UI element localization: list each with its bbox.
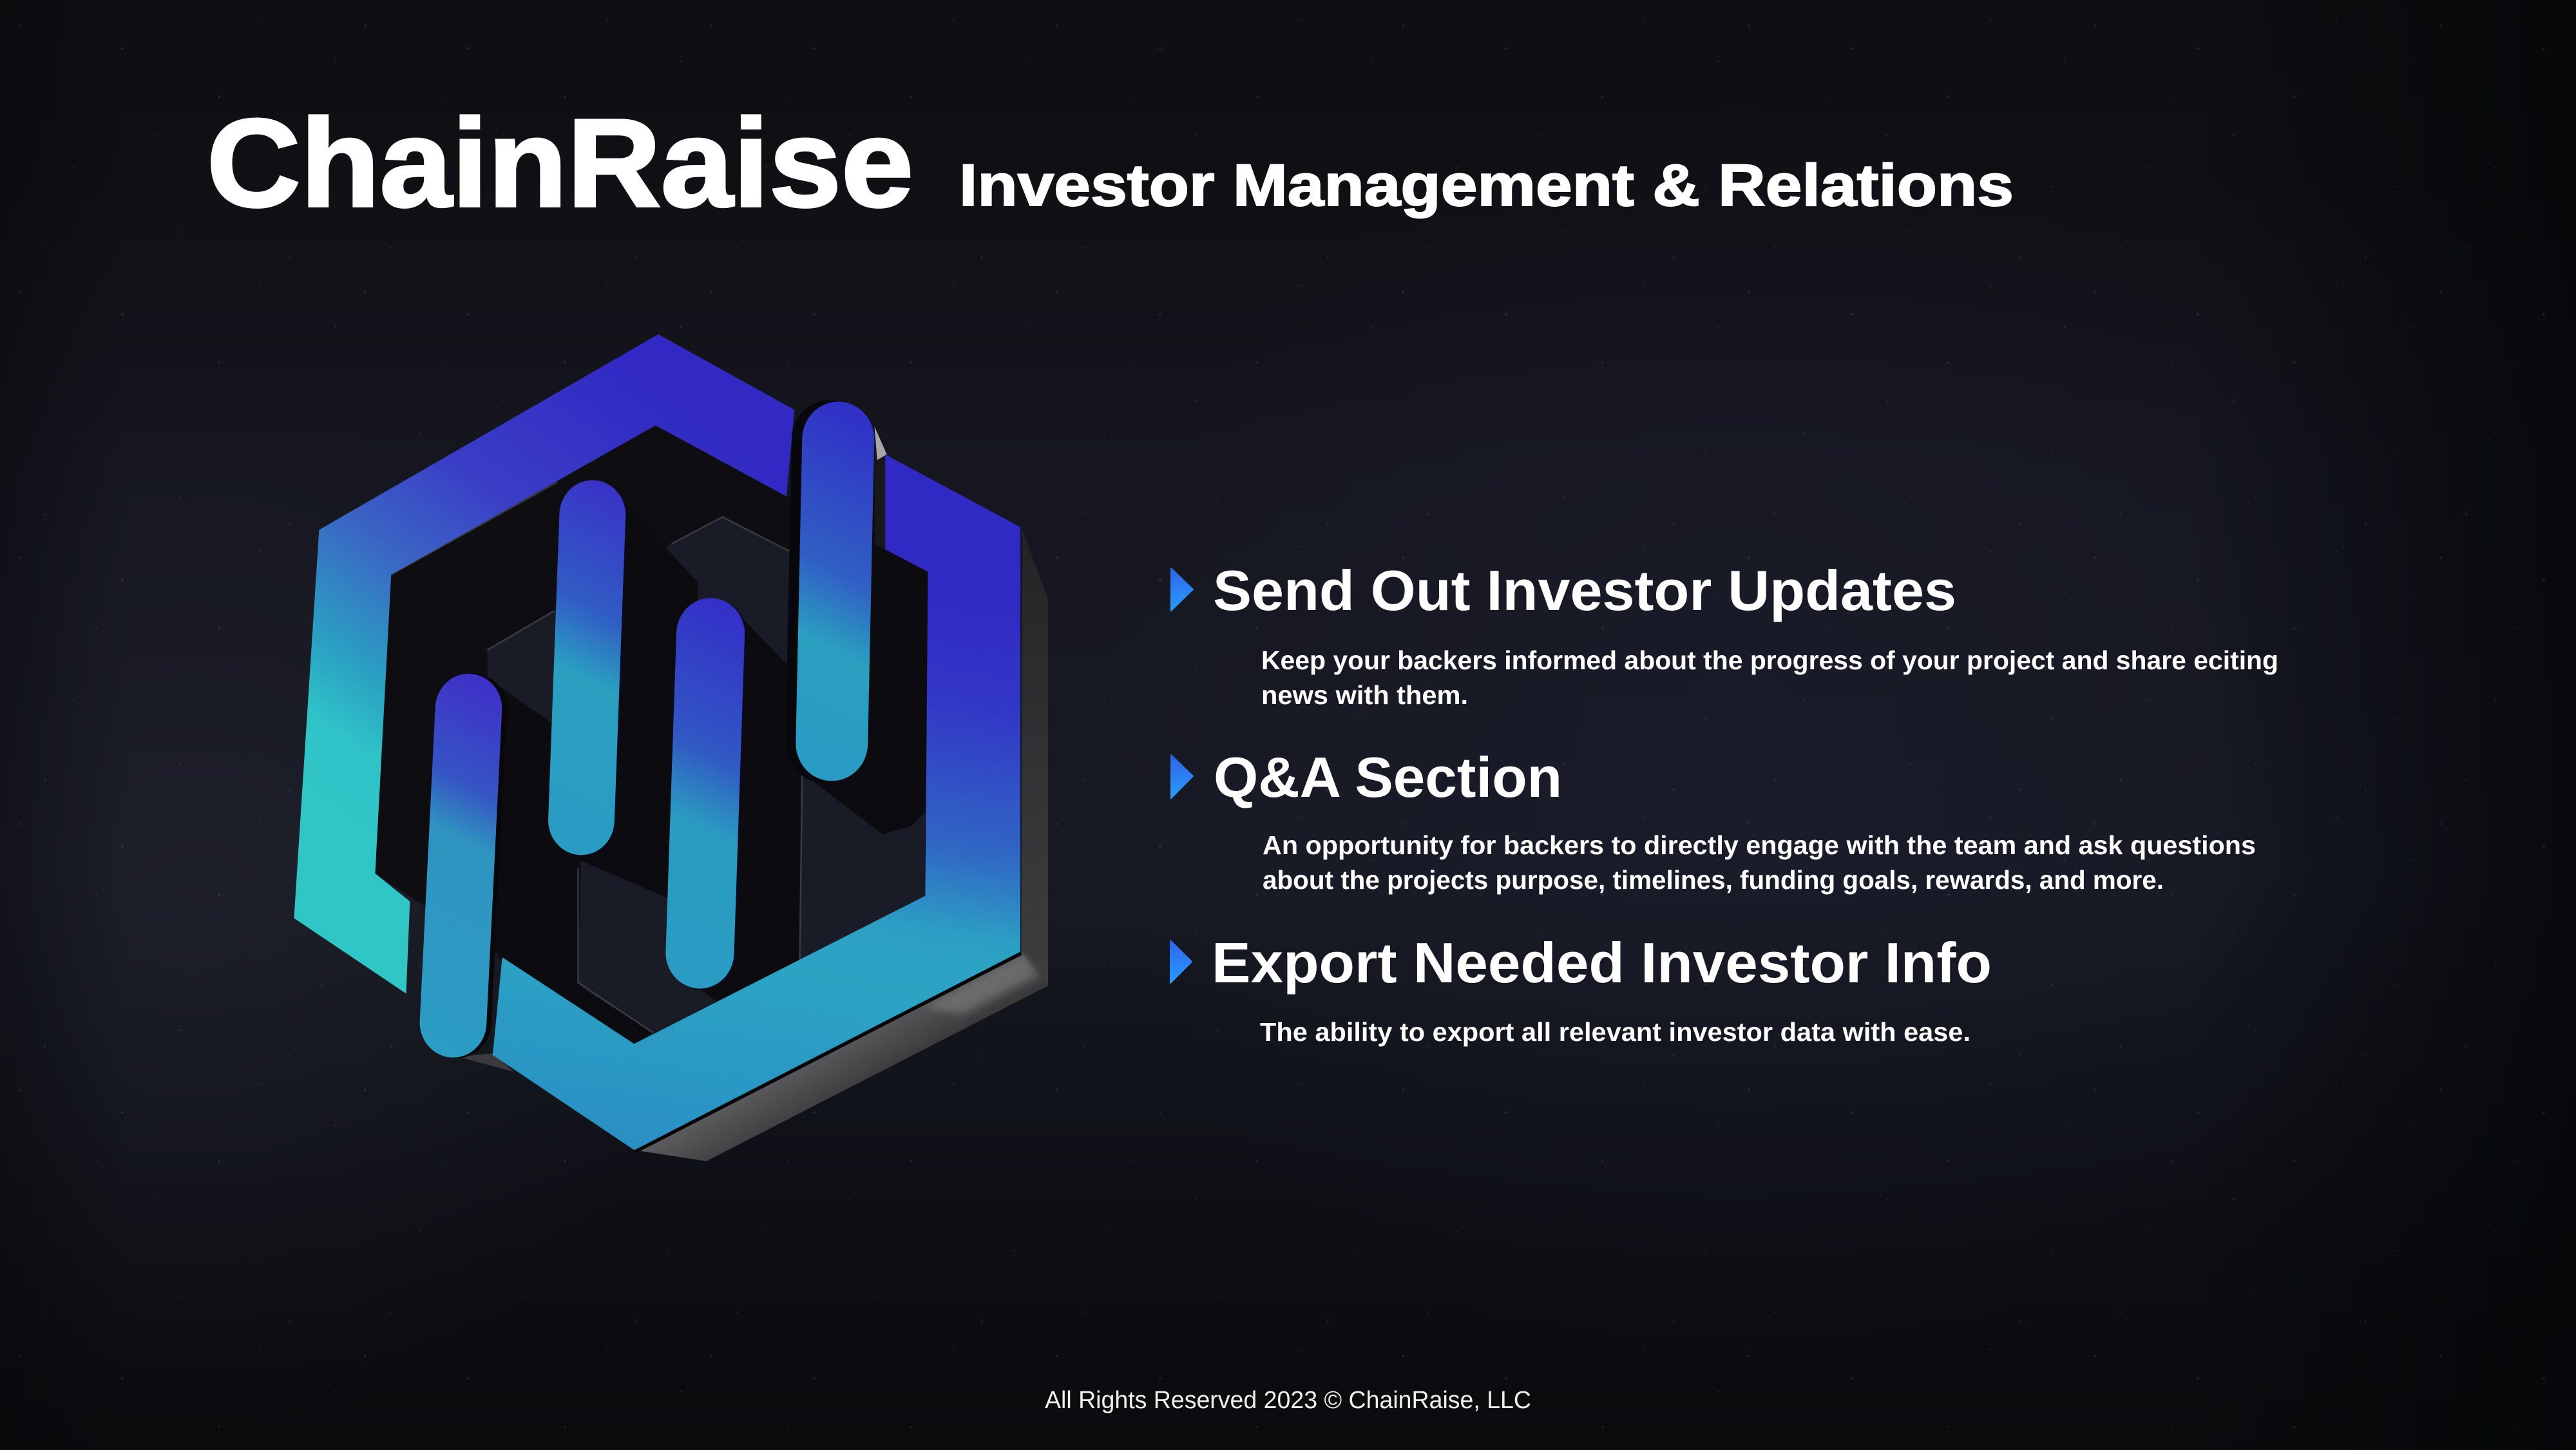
description: An opportunity for backers to directly engage with the team and ask questions (1263, 830, 2256, 860)
description: Keep your backers informed about the progress of your project and share eciting (1261, 645, 2278, 675)
see-through hole (488, 517, 925, 1044)
arrow icon (1171, 568, 1193, 611)
top bar side highlight (875, 426, 887, 549)
description: The ability to export all relevant investor data with ease. (1260, 1017, 1970, 1047)
heading: Q&A Section (1214, 745, 1562, 809)
bar 2 (581, 515, 593, 821)
corner highlight (925, 955, 1038, 1015)
bar 3 (700, 634, 711, 953)
bar 1 shadow (457, 709, 473, 1023)
item: Export Needed Investor Info (1170, 931, 1992, 1047)
bar 4 shadow (823, 439, 829, 743)
hexagon left and top piece (294, 334, 794, 993)
small lower-left side (458, 1053, 514, 1072)
right side face (1022, 530, 1048, 986)
item: Send Out Investor Updates (1171, 558, 2278, 710)
hexagon right and bottom piece (493, 454, 1020, 1150)
bar 1 (453, 709, 468, 1023)
bar 3 shadow (702, 635, 712, 954)
description (1263, 830, 2256, 895)
item: Q&A Section (1171, 745, 2256, 895)
heading: Send Out Investor Updates (1213, 558, 1956, 622)
bar extrusions (495, 449, 928, 1044)
extrusion highlights (391, 482, 803, 1033)
description: news with them. (1261, 680, 1468, 710)
lower side face (634, 951, 1048, 1161)
inner dark extrusion (375, 425, 928, 1044)
description: about the projects purpose, timelines, funding goals, rewards, and more. (1263, 865, 2164, 895)
description (1261, 645, 2278, 710)
arrow icon (1170, 940, 1192, 983)
title: ChainRaise (207, 93, 913, 233)
bar 2 shadow (584, 516, 595, 821)
front face edge line (634, 953, 1022, 1152)
bar 4 (832, 439, 838, 743)
heading: Export Needed Investor Info (1212, 931, 1992, 995)
footer: All Rights Reserved 2023 © ChainRaise, LLC (1045, 1387, 1531, 1414)
icon: ChainRaise 3D hexagon logo (294, 334, 1048, 1161)
subtitle: Investor Management & Relations (959, 153, 2014, 218)
arrow icon (1171, 755, 1193, 798)
